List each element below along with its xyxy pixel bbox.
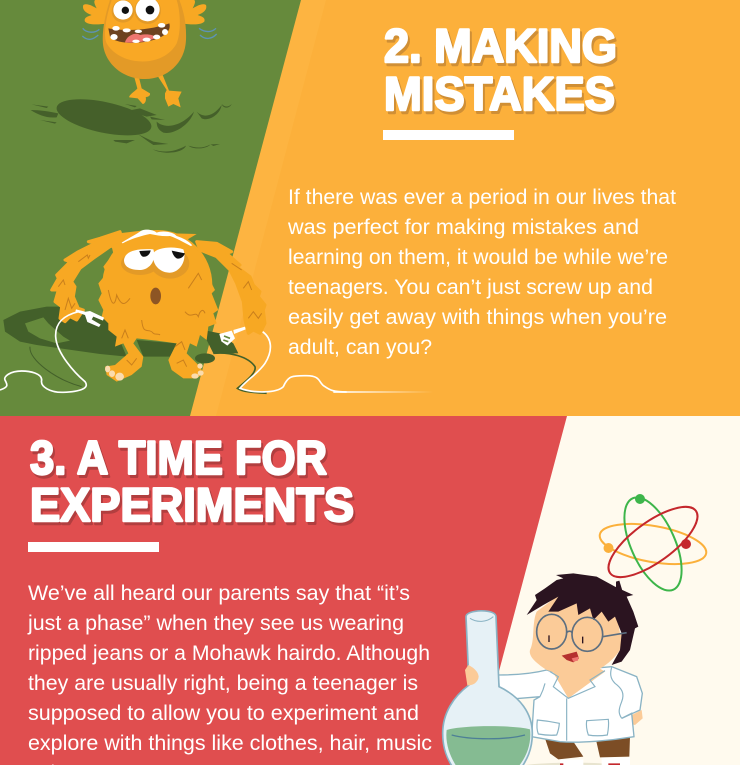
jumping monster shadow [31,92,232,153]
heading: 2. Making Mistakes: MISTAKES [386,70,617,123]
heading: 3. A Time for Experiments: 3. A TIME FOR [30,431,327,484]
eyes [112,0,134,23]
text block: experiments: ripped jeans or a Mohawk hairdo. Although [28,642,430,665]
legs [545,737,630,759]
left cord [0,312,86,392]
body [103,0,186,79]
neck [552,667,605,698]
illustration: fuzzy monster with unplugged cord [0,230,433,393]
fur squiggles [58,255,262,367]
icon: atom [597,489,709,599]
text block: experiments: supposed to allow you to experiment and [28,702,419,725]
heading: 2. Making Mistakes: 2. MAKING [386,22,619,75]
right plug [219,327,246,346]
heading: 3. A Time for Experiments: EXPERIMENTS [32,481,356,534]
floor and shoes [518,763,628,765]
heading: 3. A Time for Experiments [30,431,356,534]
heading underline [383,130,514,140]
toes [105,363,204,381]
text block: experiments: We’ve all heard our parents say that “it’s [28,582,410,605]
panel: making mistakes background [0,0,740,416]
smile [562,652,579,662]
left arm [52,232,123,322]
text block: experiments: they are usually right, being a teenager is [28,672,418,695]
text block: making mistakes: easily get away with things when you’re [288,306,667,329]
hand on flask [465,665,479,685]
wings and motion lines [83,0,206,24]
illustration: jumping monster [31,0,232,153]
text block: experiments: just a phase” when they see us wearing [27,612,404,635]
text block: experiments: explore with things like clothes, hair, music [28,732,432,755]
panel: experiments background [0,416,740,765]
lab coat [498,667,642,742]
monster shadow [3,307,267,393]
heading: 2. Making Mistakes: MISTAKES [384,67,615,120]
text block: experiments [27,582,432,765]
mouth [150,288,161,304]
left plug [75,309,104,327]
text block: making mistakes: learning on them, it would be while we’re [288,246,668,269]
heading underline [28,542,159,552]
text block: making mistakes: adult, can you? [288,336,432,359]
flask liquid [446,726,530,765]
heading: 2. Making Mistakes: 2. MAKING [384,19,617,72]
legs and feet [129,75,182,107]
mouth [108,23,170,43]
heading: 3. A Time for Experiments: 3. A TIME FOR [32,434,329,487]
heading: 2. Making Mistakes [384,19,619,123]
hand on hip [625,710,643,725]
coat details [537,667,623,741]
illustration: scientist with flask [443,573,643,765]
right cord [240,332,433,392]
furry body [98,230,218,382]
hair [527,573,638,665]
right arm [197,242,265,333]
white hair [122,230,192,246]
face [530,597,627,680]
eyes [549,635,583,643]
text block: making mistakes: If there was ever a period in our lives that [288,186,676,209]
heading: 3. A Time for Experiments: EXPERIMENTS [30,478,354,531]
text block: making mistakes: was perfect for making mistakes and [287,216,639,239]
flask [443,611,532,765]
glasses [537,614,627,651]
text block: making mistakes [287,186,676,359]
droopy eyes [121,252,159,275]
text block: making mistakes: teenagers. You can’t just screw up and [288,276,653,299]
